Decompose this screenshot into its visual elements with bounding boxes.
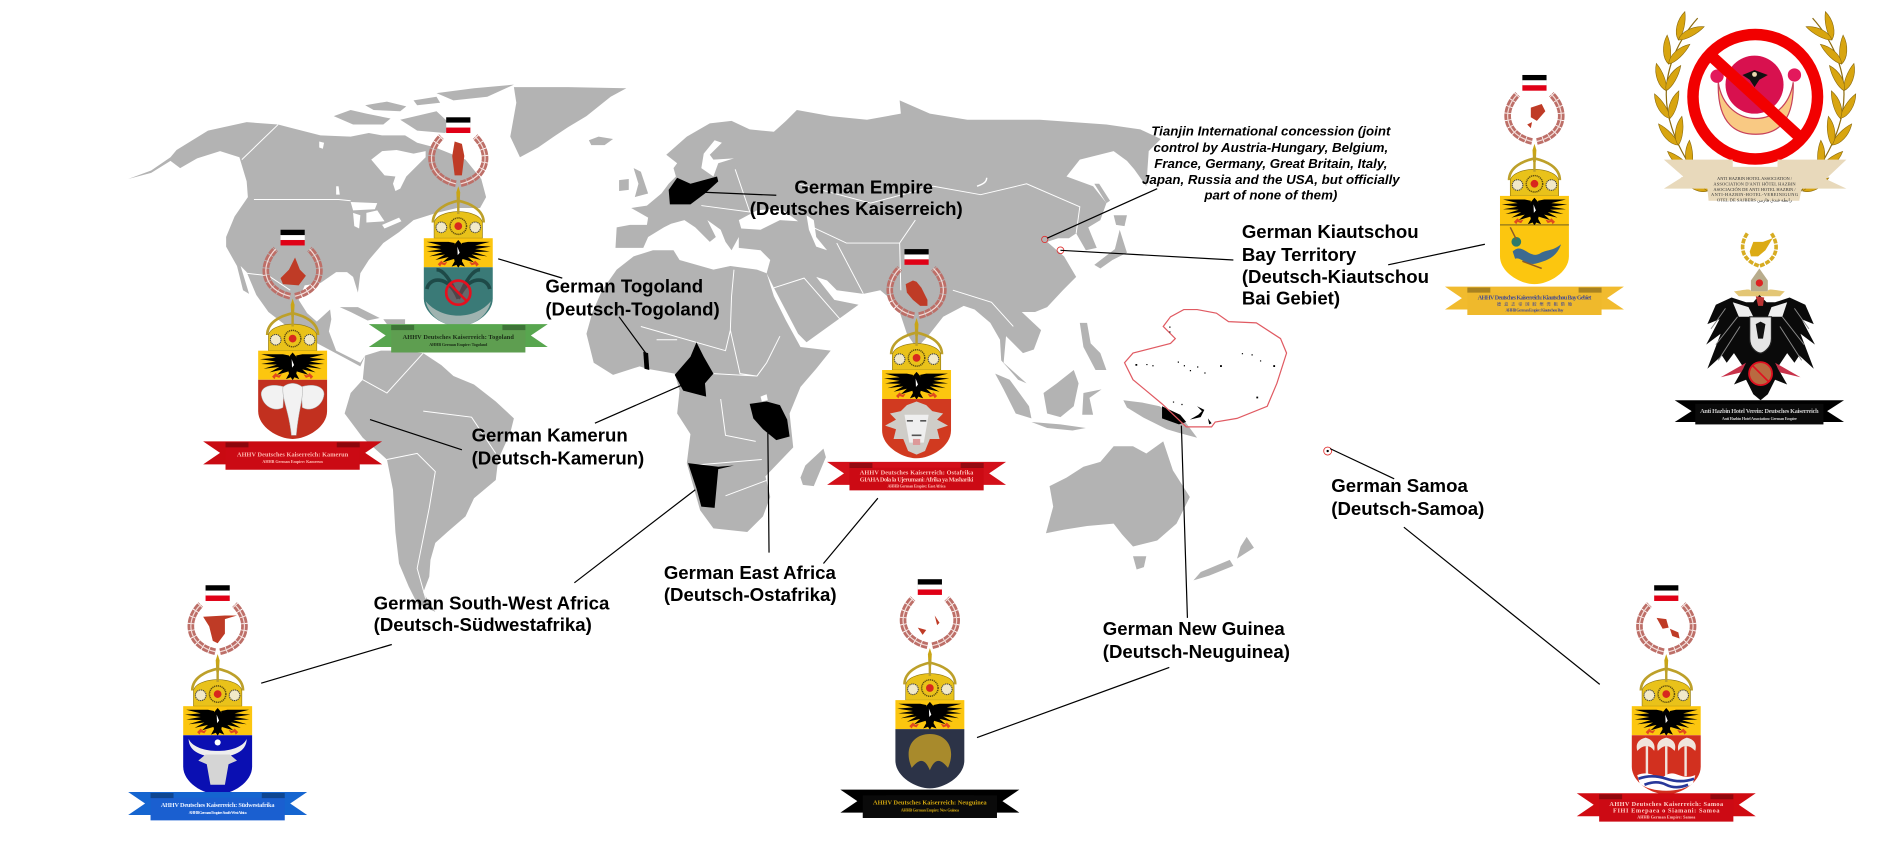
ribbon text: AHHV Deutsches Kaiserreich: Südwestafrika [161, 802, 275, 809]
label: East Africa: German East Africa [664, 562, 837, 583]
crest: East Africa: AHHB German Empire: East Africa [888, 483, 946, 488]
label: German Empire: (Deutsches Kaiserreich) [750, 198, 963, 219]
label: Kiautschou: German Kiautschou [1242, 221, 1419, 242]
ribbon text: Anti Hazbin Hotel Verein: Deutsches Kaiserreich [1700, 408, 1819, 415]
label: Tianjin concession: part of none of them) [1203, 188, 1338, 203]
land: North America [128, 122, 486, 366]
territory: East Africa [750, 401, 790, 440]
palms and waves [1637, 738, 1696, 791]
label: East Africa: (Deutsch-Ostafrika) [664, 584, 837, 605]
land: Madagascar [800, 449, 826, 486]
label: New Guinea: (Deutsch-Neuguinea) [1103, 641, 1290, 662]
country borders [242, 125, 1080, 599]
marker: Kiautschou [1057, 247, 1064, 254]
world map [128, 85, 1332, 612]
laurel wreath [1651, 11, 1860, 200]
land: Tasmania and New Zealand [1133, 537, 1254, 580]
land: Australia [1046, 441, 1190, 547]
land: Africa [586, 250, 831, 532]
land: Caribbean and North Atlantic islands [340, 137, 629, 324]
crest: East Africa: GIAHA Dola la Ujerumani: Afrika ya Mashariki [860, 476, 974, 483]
logo: anti hotel association [1651, 11, 1860, 202]
crest: Kamerun: AHHB German Empire: Kamerun [262, 459, 324, 464]
ribbon text: ANTI HAZBIN HOTEL ASSOCIATION / [1717, 176, 1793, 181]
crest: Kamerun [203, 230, 382, 470]
ribbon text: ASOCIACIÓN DE ANTI HOTEL HAZBIN / [1713, 187, 1796, 192]
land: South America [345, 351, 514, 612]
label: South-West Africa: (Deutsch-Südwestafrika) [374, 614, 592, 635]
crest: New Guinea [840, 579, 1019, 818]
label: German Empire: German Empire [794, 176, 933, 197]
ribbon text: AHHV Deutsches Kaiserreich: Ostafrika [860, 470, 974, 477]
label: Samoa: German Samoa [1331, 475, 1468, 496]
ribbon text [1711, 176, 1799, 202]
ribbon text: AHHV Deutsches Kaiserreich: Kiautschou Bay Gebiet [1478, 294, 1592, 301]
label: Tianjin concession: Tianjin International concession (joint [1151, 123, 1391, 138]
land: Eurasia [615, 100, 1161, 383]
ribbon [1664, 160, 1846, 201]
black territories [643, 177, 1212, 508]
bull head [189, 739, 247, 785]
crest: Togoland [369, 117, 548, 352]
label: Tianjin concession: control by Austria-Hungary, Belgium, [1154, 140, 1388, 155]
land: Greenland [510, 87, 626, 157]
ribbon text: ANTI-HAZBIN-HOTEL-VEREINIGUNG [1711, 192, 1799, 197]
Kiautschou silhouette [1527, 104, 1545, 128]
bird of paradise [909, 734, 951, 770]
label: Kiautschou: (Deutsch-Kiautschou [1242, 266, 1429, 287]
blue dragon [1510, 227, 1561, 268]
crest: Togoland: AHHB German Empire: Togoland [429, 342, 488, 347]
ribbon text: AHHV Deutsches Kaiserreich: Neuguinea [873, 800, 988, 807]
ribbon text: AHHV Deutsches Kaiserreich: Kamerun [237, 451, 349, 458]
small crown [1734, 268, 1785, 296]
gold silhouette [1750, 238, 1773, 256]
label: Samoa: (Deutsch-Samoa) [1331, 498, 1484, 519]
land: Arctic islands [334, 85, 514, 133]
crest: imperial eagle [1675, 233, 1844, 424]
Lake Baikal [977, 178, 987, 186]
land: New Guinea [1123, 400, 1197, 438]
leader lines [261, 189, 1600, 738]
marker: Tianjin [1042, 236, 1048, 243]
crest: Kiautschou: AHHB German Empire: Kiautschou Bay [1505, 307, 1564, 312]
land: Southeast Asian islands [995, 323, 1106, 430]
land: Britain [634, 168, 648, 197]
crest: Samoa: FIHI Emepaea o Siamani: Samoa [1613, 808, 1720, 815]
Samoa silhouette [1657, 618, 1680, 638]
crest: New Guinea: AHHB German Empire: New Guinea [901, 807, 959, 812]
black eagle [1706, 295, 1815, 400]
crest: South-West Africa: AHHB German Empire: South-West Africa [189, 810, 247, 815]
label: Kiautschou: Bai Gebiet) [1242, 288, 1340, 309]
territory: South-West Africa [688, 463, 734, 508]
crest: imperial eagle: Anti Hazbin Hotel Association: German Empire [1722, 416, 1797, 421]
smiling emblem [1710, 56, 1801, 134]
crest: Samoa: AHHB German Empire: Samoa [1637, 815, 1695, 820]
crest: Kiautschou: 德意志帝国胶州湾租借地 [1497, 300, 1572, 306]
crest: East Africa [827, 249, 1006, 490]
label: Togoland: (Deutsch-Togoland) [545, 299, 720, 320]
territory: Bismarck Archipelago [1190, 406, 1212, 424]
inland seas [319, 140, 827, 401]
label: South-West Africa: German South-West Africa [374, 592, 610, 613]
lion head [885, 401, 948, 455]
South-West Africa silhouette [203, 615, 237, 643]
palm and prohibited sign [426, 270, 491, 326]
Pacific islands [1135, 326, 1275, 405]
crest: Samoa [1577, 585, 1756, 822]
territory: Kamerun [675, 342, 713, 397]
label: Tianjin concession: Japan, Russia and the USA, but officially [1142, 172, 1400, 187]
ribbon text: AHHV Deutsches Kaiserreich: Samoa [1609, 801, 1724, 808]
ribbon text: AHHV Deutsches Kaiserreich: Togoland [403, 334, 514, 341]
marker: Samoa [1324, 447, 1332, 455]
land: Japan and Sakhalin [1094, 184, 1127, 268]
Togoland silhouette [452, 141, 464, 175]
prohibition sign [1693, 34, 1818, 159]
label: Kamerun: (Deutsch-Kamerun) [472, 447, 644, 468]
Kamerun silhouette [281, 258, 306, 285]
territory: German Empire [669, 177, 718, 204]
gold wreath [1743, 233, 1776, 266]
ribbon text: OTEL DE SAJBERS رابطة فندق هازبين [1717, 197, 1792, 202]
territory: Kaiser-Wilhelmsland [1162, 406, 1186, 424]
label: New Guinea: German New Guinea [1103, 618, 1285, 639]
Pacific territory boundary [1125, 310, 1287, 427]
label: Kiautschou: Bay Territory [1242, 244, 1357, 265]
label: Kamerun: German Kamerun [472, 424, 628, 445]
New Guinea silhouette [918, 615, 940, 635]
crest: South-West Africa [128, 585, 307, 820]
crest: Kiautschou [1445, 75, 1624, 315]
label: Togoland: German Togoland [545, 276, 703, 297]
territory: Togoland [643, 352, 649, 370]
ribbon text: ASSOCIATION D'ANTI HÔTEL HAZBIN [1713, 181, 1796, 186]
label: Tianjin concession: France, Germany, Great Britain, Italy, [1154, 156, 1387, 171]
East Africa silhouette [906, 281, 927, 306]
